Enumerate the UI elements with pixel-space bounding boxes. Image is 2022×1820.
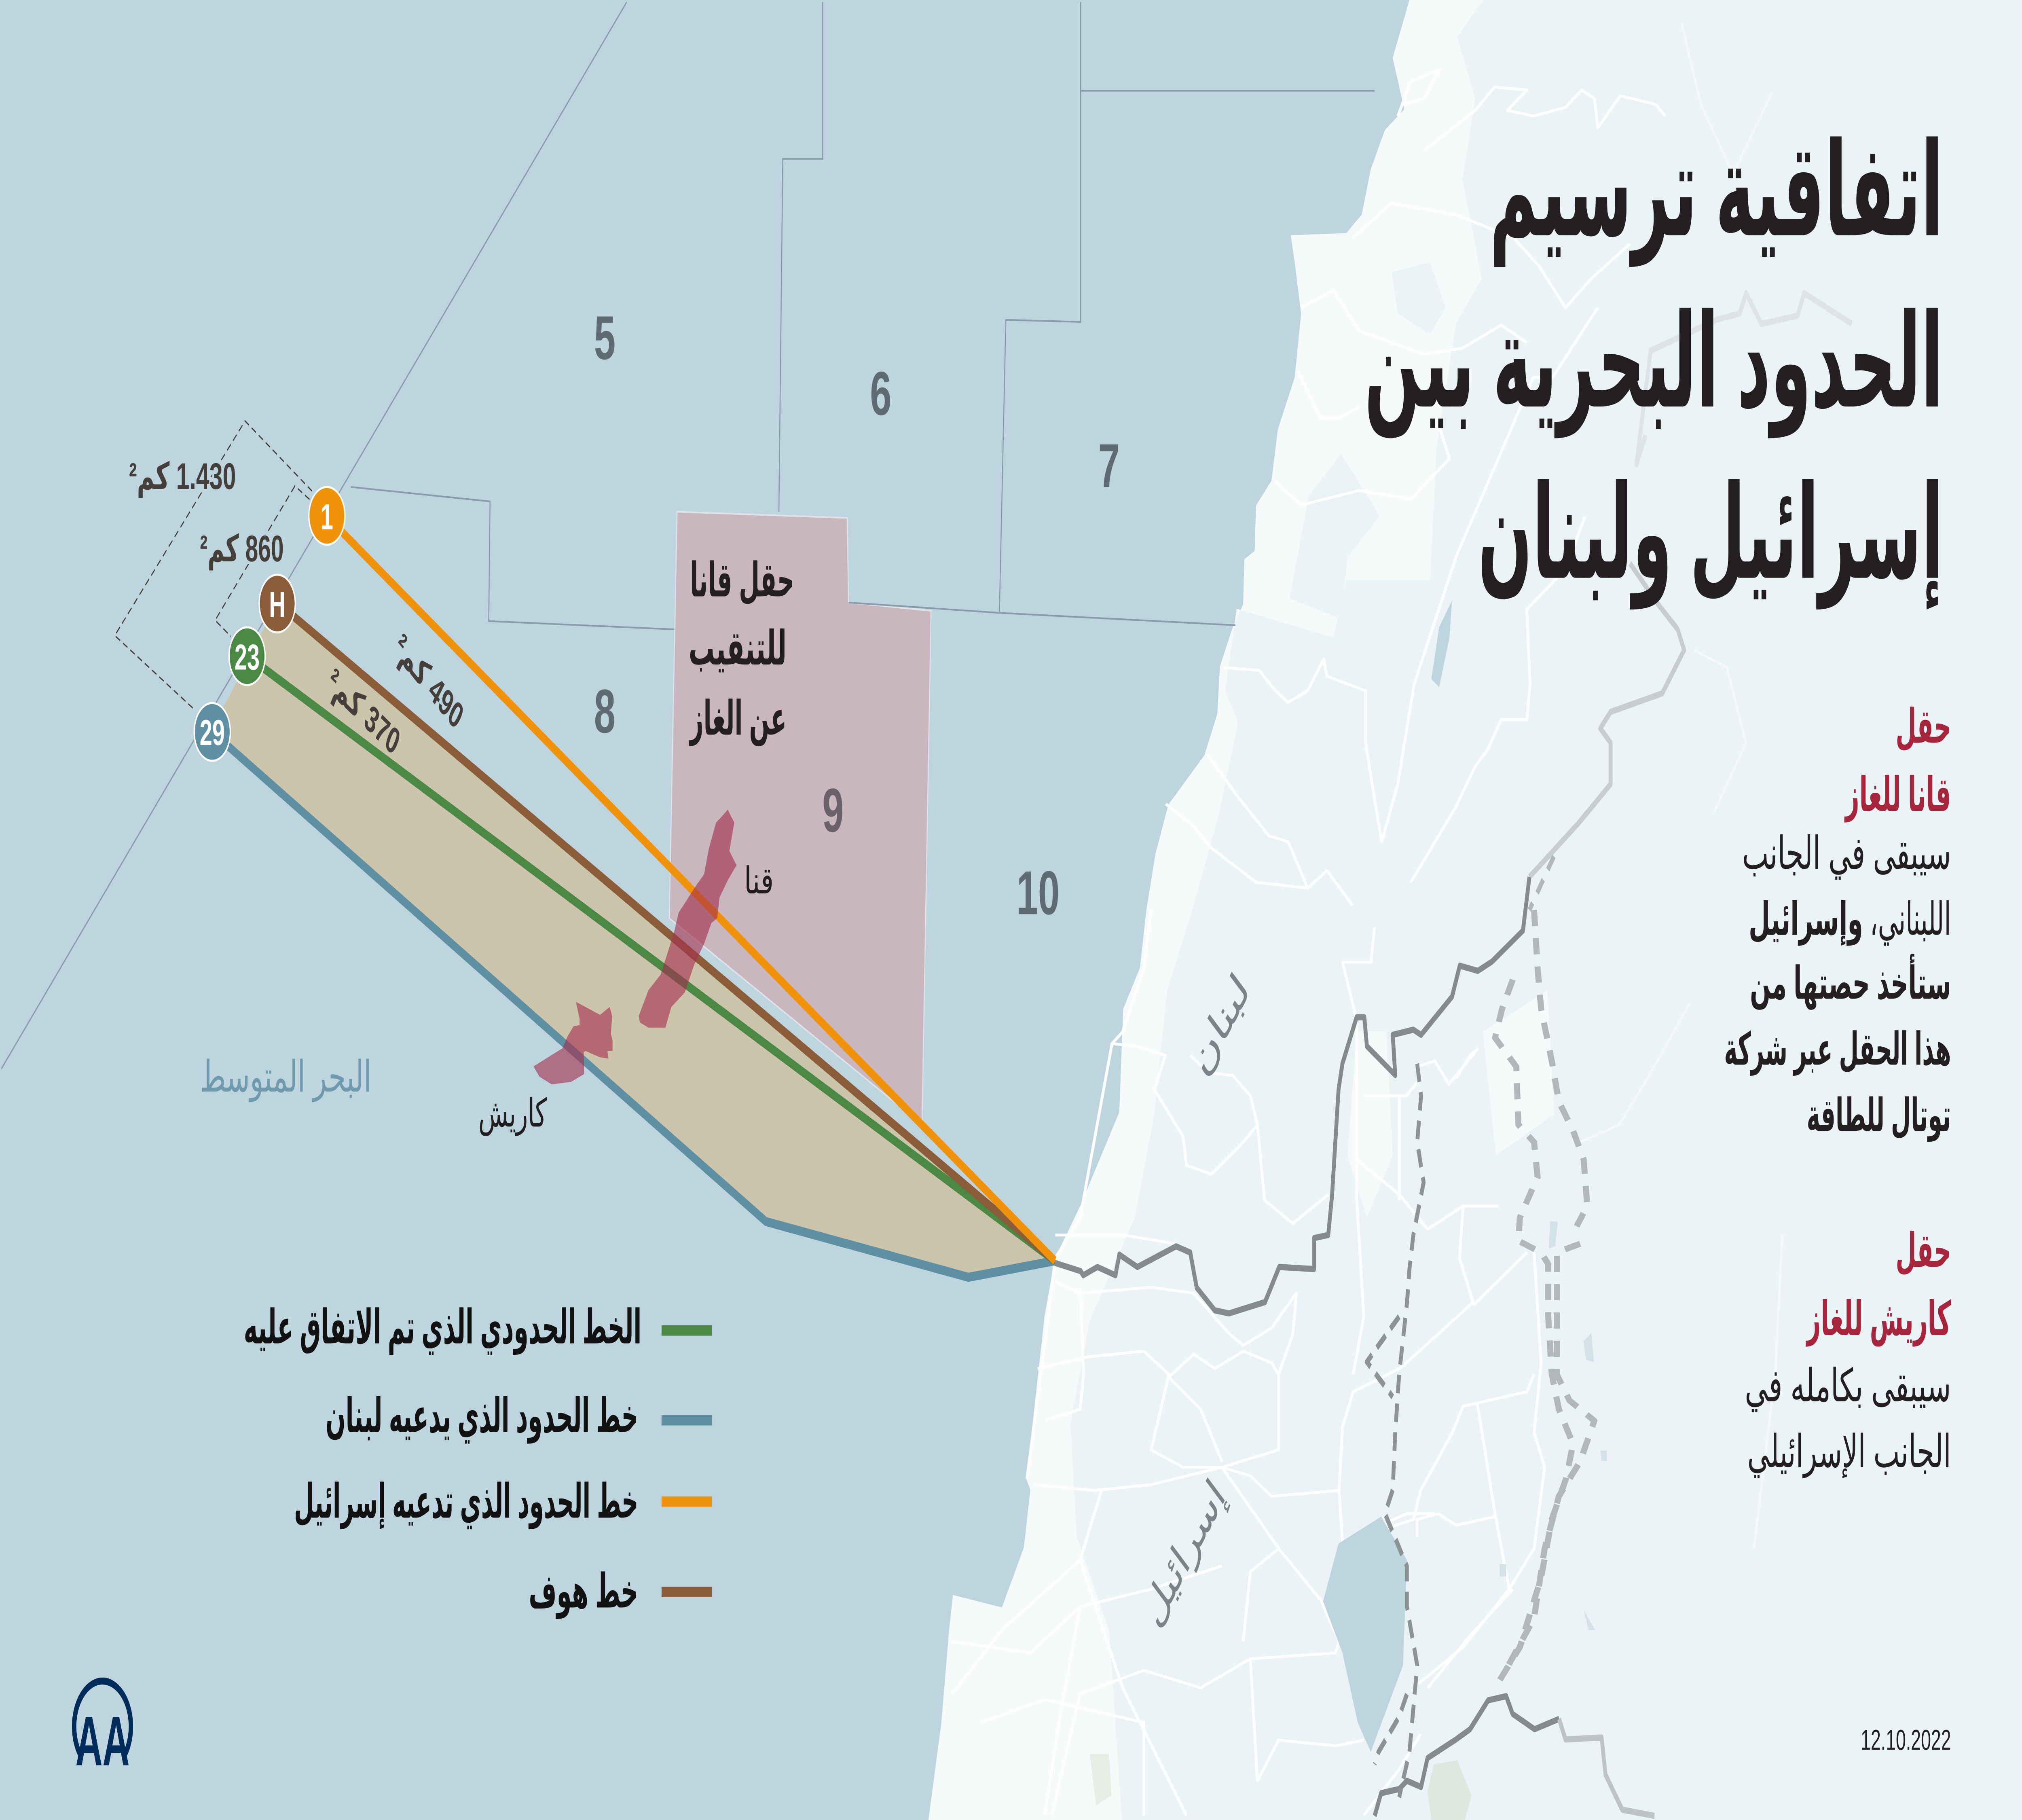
legend: agreed line: الخط الحدودي الذي تم الاتفاق عليه — [244, 1300, 641, 1356]
block numbers — [594, 305, 1120, 929]
block numbers: 8 — [594, 679, 615, 747]
border: Lebanon upper, faded — [1529, 563, 1684, 877]
boundary lines — [213, 516, 1055, 1277]
legend — [244, 1300, 712, 1620]
block numbers: 10 — [1017, 861, 1060, 929]
marker 29 — [194, 703, 231, 761]
label Mediterranean: البحر المتوسط — [200, 1054, 371, 1104]
Qana field heading: للتنقيب — [689, 621, 787, 675]
maritime block boundaries — [1, 2, 1375, 1069]
text block: Karish: الجانب الإسرائيلي — [1747, 1426, 1951, 1479]
title — [1364, 120, 1943, 611]
lake: Tiberias — [1323, 1517, 1407, 1752]
text block: Karish: سيبقى بكامله في — [1745, 1360, 1951, 1414]
point markers — [194, 487, 345, 761]
Qana field heading — [689, 553, 794, 747]
Qana field heading: عن الغاز — [689, 691, 787, 747]
legend: Israel line: خط الحدود الذي تدعيه إسرائيل — [294, 1474, 638, 1530]
date: 12.10.2022 — [1861, 1723, 1951, 1756]
border: dashed dark — [1367, 1064, 1423, 1797]
text block: Karish: كاريش للغاز — [1806, 1292, 1952, 1348]
text block: Qana: سيبقى في الجانب — [1742, 827, 1951, 881]
roads — [952, 23, 1782, 1816]
label Israel: إسرائيل — [1136, 1469, 1233, 1638]
block numbers: 7 — [1098, 433, 1120, 502]
AA logo — [74, 1681, 131, 1782]
Hof line — [277, 603, 1055, 1261]
marker H — [259, 575, 295, 633]
area label 370: 370 كم² — [322, 660, 405, 765]
block numbers: 5 — [594, 305, 615, 373]
area label 1430: 1.430 كم² — [129, 456, 236, 499]
dashed area brackets — [115, 421, 312, 710]
marker 23: 23 — [235, 637, 260, 678]
line 23 agreed — [247, 656, 1055, 1261]
line 1 Israel — [326, 516, 1055, 1261]
legend: Hof line: خط هوف — [529, 1564, 638, 1620]
area label 490: 490 كم² — [389, 626, 468, 739]
borders — [1055, 293, 1852, 1816]
marker 23 — [229, 627, 265, 685]
marker H: H — [269, 584, 286, 625]
land mass — [929, 0, 2022, 1820]
marker 1 — [309, 487, 345, 545]
text block: Karish: حقل — [1896, 1224, 1951, 1277]
label Lebanon: لبنان — [1184, 963, 1256, 1086]
border: West Bank north — [1375, 1696, 1559, 1816]
border: West Bank east faded — [1559, 1719, 1654, 1816]
text block: Qana: هذا الحقل عبر شركة — [1724, 1024, 1951, 1077]
border: dashed light — [1495, 856, 1594, 1682]
block 9 highlighted area — [669, 512, 931, 1125]
AA logo: AA — [76, 1704, 129, 1782]
legend: Lebanon line: خط الحدود الذي يدعيه لبنان — [326, 1389, 638, 1444]
text block: Qana: حقل — [1896, 700, 1951, 753]
block numbers: 9 — [822, 778, 844, 846]
line 29 Lebanon — [213, 732, 1055, 1277]
label Qana: قنا — [744, 861, 774, 902]
marker 1: 1 — [321, 496, 334, 538]
gas field: Qana — [639, 810, 736, 1028]
border: Lebanon-Syria under title — [1637, 293, 1852, 464]
marker 29: 29 — [200, 712, 225, 753]
label Karish: كاريش — [478, 1094, 548, 1137]
small water bodies — [1500, 1221, 1607, 1630]
text block: Qana: ستأخذ حصتها من — [1750, 953, 1951, 1011]
disputed area — [212, 603, 1055, 1277]
text block: Qana — [1724, 700, 1951, 1143]
forest patches — [1428, 1760, 1471, 1820]
Qana field heading: حقل قانا — [690, 553, 794, 607]
text block: Qana: اللبناني، وإسرائيل — [1749, 893, 1951, 947]
border: Lebanon-Israel — [1055, 877, 1529, 1313]
area label 860: 860 كم² — [200, 528, 284, 571]
text block: Qana: قانا للغاز — [1844, 768, 1951, 823]
coastal urban band — [929, 0, 1483, 1820]
block numbers: 6 — [870, 361, 892, 429]
text block: Qana: توتال للطاقة — [1806, 1090, 1951, 1143]
gas field: Karish — [533, 1002, 613, 1084]
lake: Qaraoun — [1432, 601, 1452, 687]
text block: Karish — [1745, 1224, 1952, 1479]
